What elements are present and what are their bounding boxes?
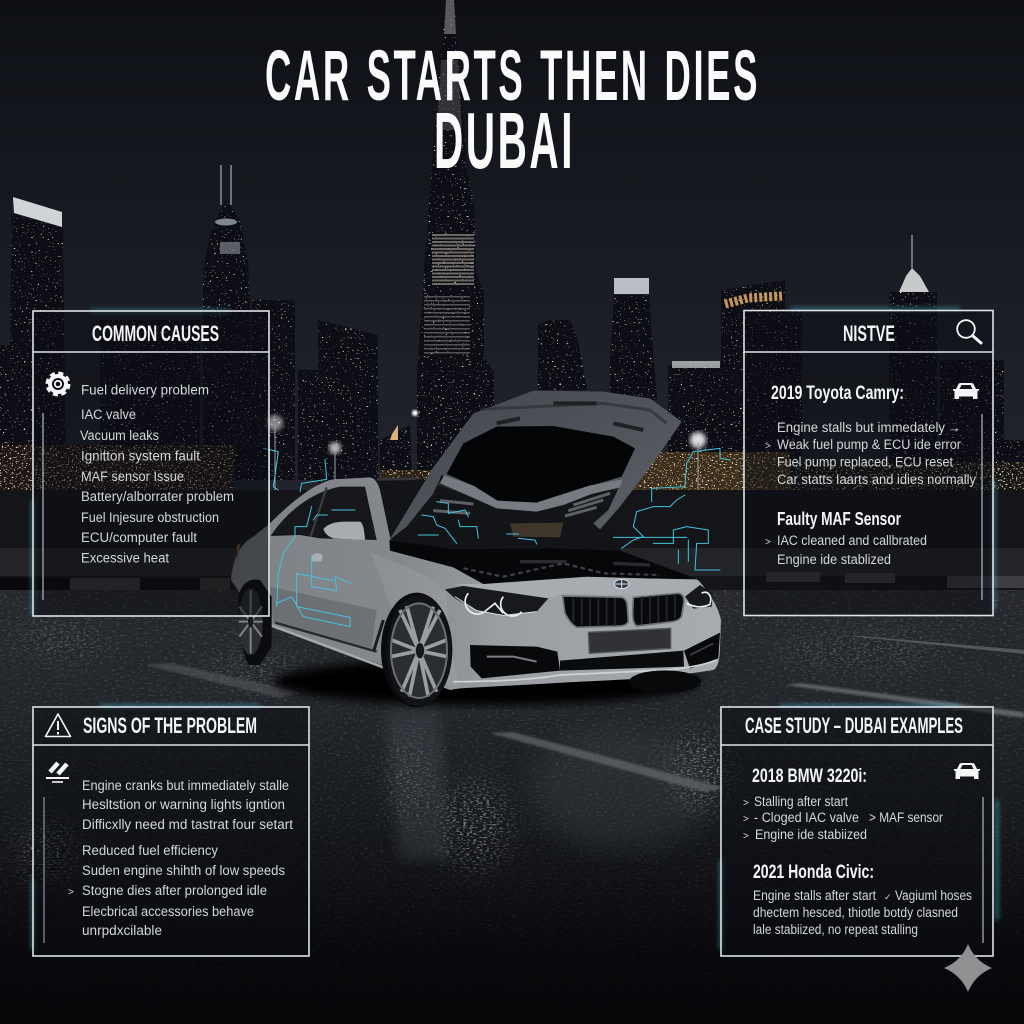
- list: causes: Vacuum leaks: [80, 428, 159, 443]
- list: causes: Battery/alborrater problem: [81, 489, 234, 504]
- list: causes: [80, 382, 234, 566]
- list: signs: Reduced fuel efficiency: [82, 843, 218, 858]
- cyan glow beside panels: [33, 309, 997, 950]
- subheading: honda: 2021 Honda Civic:: [753, 862, 874, 883]
- divider rule: [43, 797, 45, 943]
- subheading: faulty maf: Faulty MAF Sensor: [777, 509, 901, 529]
- engine bay: [389, 540, 700, 584]
- far front tyre: [629, 670, 701, 693]
- icon: warning triangle: [46, 714, 70, 736]
- city glow band: [0, 445, 1024, 500]
- text: camry details: Weak fuel pump & ECU ide error: [777, 437, 961, 452]
- background: night sky: [0, 0, 1024, 600]
- text: bmw details: - Cloged IAC valve: [754, 810, 859, 825]
- front wheel: [381, 593, 452, 707]
- text: bmw details: Stalling after start: [754, 794, 848, 809]
- text: camry details: Fuel pump replaced, ECU reset: [777, 454, 953, 470]
- text: bmw details: >: [743, 798, 749, 809]
- tail light: [237, 543, 241, 560]
- text: bmw details: > MAF sensor: [869, 810, 943, 825]
- list: signs: Difficxlly need md tastrat four setart: [82, 817, 293, 832]
- text: maf details: Engine ide stablized: [777, 552, 891, 567]
- text: honda details: lale stabiized, no repeat stalling: [753, 922, 918, 937]
- text: camry details: Car statts Iaarts and idies normally: [777, 472, 976, 487]
- list: signs: Stogne dies after prolonged idle: [82, 883, 267, 898]
- text: bmw details: >: [743, 814, 749, 825]
- divider rule: [42, 413, 44, 600]
- license plate: [588, 628, 671, 653]
- rear wheel: [238, 580, 272, 665]
- burj tower: [417, 0, 494, 480]
- list: signs: >: [68, 887, 74, 898]
- list: signs: Elecbrical accessories behave: [82, 904, 254, 919]
- list: causes: Fuel Injesure obstruction: [81, 510, 219, 525]
- panel: common causes: [33, 311, 269, 616]
- left headlight: [445, 586, 548, 616]
- divider rule: [981, 414, 983, 600]
- text: bmw details: Engine ide stabiized: [755, 827, 867, 842]
- windshield and bay background: [377, 479, 623, 557]
- right headlight: [685, 585, 713, 609]
- title: DUBAI: [434, 96, 575, 185]
- road and barrier: [0, 490, 1024, 590]
- heading: nistve: NISTVE: [843, 321, 895, 346]
- panel: nistve: [744, 310, 993, 616]
- subheading: toyota camry: 2019 Toyota Camry:: [771, 383, 904, 404]
- text: camry details: Engine stalls but immedately: [777, 420, 945, 435]
- text: camry details: >: [765, 441, 771, 452]
- text: maf details: IAC cleaned and callbrated: [777, 533, 927, 548]
- open hood: [389, 391, 682, 540]
- door mirror: [323, 522, 365, 540]
- text: bmw details: [743, 794, 943, 842]
- icon: magnifier: [957, 320, 981, 343]
- cyan circuit overlay: [263, 447, 730, 627]
- street lamps: [267, 410, 706, 490]
- icon: car: [954, 763, 980, 779]
- list: causes: IAC valve: [81, 407, 136, 422]
- badge: [614, 579, 629, 589]
- list: signs: Suden engine shihth of low speeds: [82, 863, 285, 878]
- list: signs: unrpdxcilable: [82, 923, 162, 938]
- text: maf details: >: [765, 537, 771, 548]
- subheading: bmw: 2018 BMW 3220i:: [752, 766, 867, 787]
- tower crowns: [13, 165, 929, 440]
- list: causes: Ignitton system fault: [81, 448, 200, 464]
- skyline: Dubai towers: [0, 0, 1024, 500]
- list: causes: Excessive heat: [81, 550, 169, 566]
- text: honda details: [753, 888, 972, 937]
- list: signs: [68, 778, 293, 938]
- car ground shadow: [273, 658, 700, 705]
- heading: common causes: COMMON CAUSES: [92, 321, 219, 346]
- divider rule: [982, 797, 984, 943]
- list: causes: MAF sensor Issue: [81, 469, 184, 484]
- wet asphalt ground: [0, 590, 1024, 950]
- list: signs: Engine cranks but immediately stalle: [82, 778, 289, 793]
- panel: signs of the problem: [33, 707, 309, 956]
- kidney grille: [563, 593, 684, 627]
- text: camry details: →: [948, 420, 961, 435]
- text: honda details: ✓: [884, 892, 892, 902]
- title: [265, 37, 760, 185]
- hood front highlight: [453, 577, 697, 598]
- side windows: [271, 479, 417, 540]
- panel: case study: [721, 707, 993, 956]
- list: causes: ECU/computer fault: [81, 530, 197, 545]
- text: honda details: Engine stalls after start: [753, 888, 876, 903]
- icon: sensor glyph: [46, 763, 69, 782]
- text: maf details: [765, 533, 927, 567]
- car: silver BMW with open hood: [231, 391, 730, 707]
- icon: car: [953, 383, 979, 399]
- text: camry details: [765, 420, 976, 487]
- lower intakes: [453, 633, 720, 682]
- car body: [231, 477, 721, 690]
- icon: gear: [47, 373, 69, 395]
- door handle: [311, 553, 323, 562]
- text: honda details: Vagiuml hoses: [895, 888, 972, 903]
- list: causes: Fuel delivery problem: [81, 382, 209, 398]
- heading: signs: SIGNS OF THE PROBLEM: [83, 713, 257, 738]
- list: signs: Hesltstion or warning lights igntion: [82, 797, 285, 812]
- text: honda details: dhectem hesced, thiotle botdy clasned: [753, 905, 958, 920]
- text: bmw details: >: [743, 831, 749, 842]
- icon: four-point star: [944, 944, 992, 992]
